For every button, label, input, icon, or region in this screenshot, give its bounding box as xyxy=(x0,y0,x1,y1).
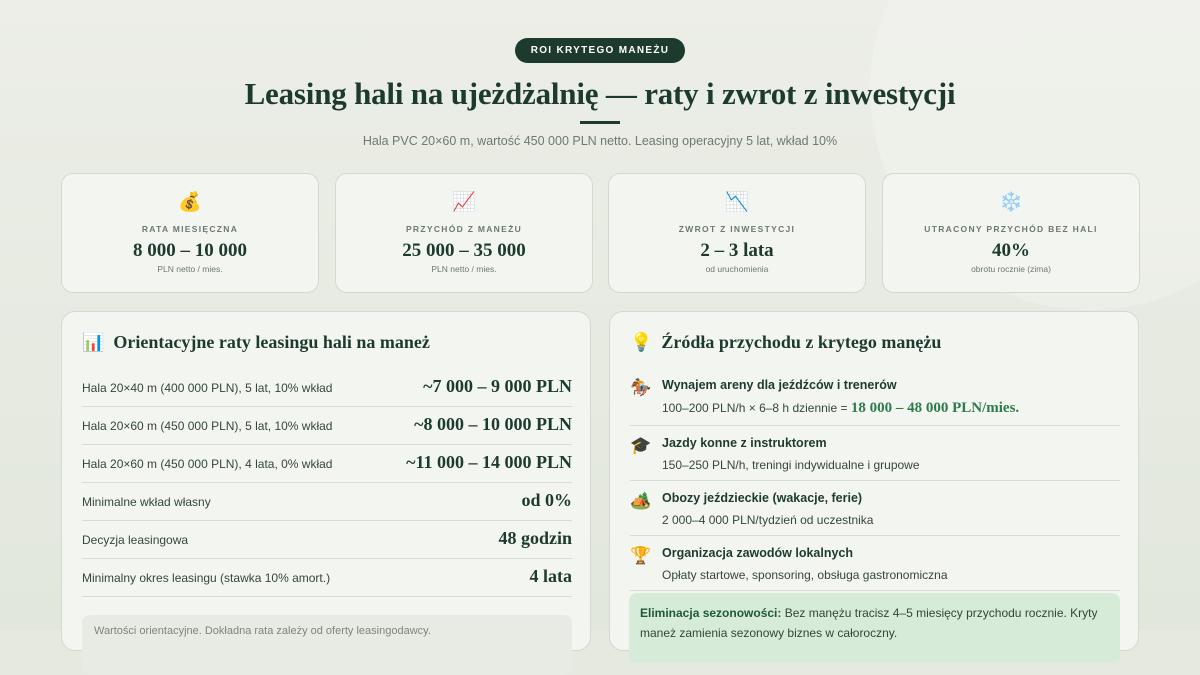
card: przychód: PLN netto / mies. xyxy=(431,264,497,274)
item: wynajem: 🏇 xyxy=(630,378,651,397)
card: rata: PLN netto / mies. xyxy=(157,264,223,274)
item: obozy: Obozy jeździeckie (wakacje, ferie) xyxy=(662,491,862,505)
panel: raty leasingu xyxy=(61,311,591,651)
row 2 xyxy=(82,407,572,445)
note: Wartości orientacyjne. Dokładna rata zależy od oferty leasingodawcy. xyxy=(94,625,431,637)
item: zawody: Opłaty startowe, sponsoring, obsługa gastronomiczna xyxy=(662,568,948,582)
card: przychód: 25 000 – 35 000 xyxy=(402,240,526,261)
row 1: ~7 000 – 9 000 PLN xyxy=(423,376,572,396)
card: przychód xyxy=(335,173,593,293)
row 4: od 0% xyxy=(521,490,572,510)
item: zawody: Organizacja zawodów lokalnych xyxy=(662,546,853,560)
card: utracony: obrotu rocznie (zima) xyxy=(971,264,1051,274)
item: jazdy: 🎓 xyxy=(630,436,651,455)
panel: źródła przychodu xyxy=(609,311,1139,651)
row 3: ~11 000 – 14 000 PLN xyxy=(406,452,572,472)
item: jazdy xyxy=(630,432,1120,481)
card: zwrot xyxy=(608,173,866,293)
row 4 xyxy=(82,483,572,521)
item: jazdy: Jazdy konne z instruktorem xyxy=(662,436,827,450)
card: zwrot: 📉 xyxy=(725,192,749,213)
row 3 xyxy=(82,445,572,483)
card: rata: RATA MIESIĘCZNA xyxy=(142,224,238,234)
card: rata xyxy=(61,173,319,293)
row 3: Hala 20×60 m (450 000 PLN), 4 lata, 0% wkład xyxy=(82,457,332,471)
card: rata: 💰 xyxy=(178,192,202,213)
row 5 xyxy=(82,521,572,559)
row 6: Minimalny okres leasingu (stawka 10% amort.) xyxy=(82,571,330,585)
item: obozy xyxy=(630,487,1120,536)
card: utracony: 40% xyxy=(992,240,1030,261)
row 2: Hala 20×60 m (450 000 PLN), 5 lat, 10% wkład xyxy=(82,419,332,433)
card: utracony: UTRACONY PRZYCHÓD BEZ HALI xyxy=(924,224,1098,234)
row 6: 4 lata xyxy=(530,566,572,586)
callout: Eliminacja sezonowości: Bez manężu tracisz 4–5 miesięcy przychodu rocznie. Kryty maneż zamienia sezonowy biznes w całoroczny. xyxy=(640,606,1098,640)
card: utracony: ❄️ xyxy=(999,192,1023,213)
note xyxy=(82,615,572,675)
card: rata: 8 000 – 10 000 xyxy=(133,240,247,261)
badge: ROI KRYTEGO MANEŻU xyxy=(531,45,669,56)
item: obozy: 🏕️ xyxy=(630,491,651,510)
item: zawody xyxy=(630,542,1120,591)
row 2: ~8 000 – 10 000 PLN xyxy=(414,414,572,434)
card: przychód: PRZYCHÓD Z MANEŻU xyxy=(406,224,522,234)
card: zwrot: 2 – 3 lata xyxy=(700,240,774,261)
card: przychód: 📈 xyxy=(452,192,476,213)
item: zawody: 🏆 xyxy=(630,546,651,565)
badge xyxy=(515,38,685,63)
row 5: 48 godzin xyxy=(498,528,572,548)
item: obozy: 2 000–4 000 PLN/tydzień od uczestnika xyxy=(662,513,873,527)
row 4: Minimalne wkład własny xyxy=(82,495,211,509)
row 5: Decyzja leasingowa xyxy=(82,533,188,547)
row 1: Hala 20×40 m (400 000 PLN), 5 lat, 10% wkład xyxy=(82,381,332,395)
item: wynajem: 100–200 PLN/h × 6–8 h dziennie = 18 000 – 48 000 PLN/mies. xyxy=(662,400,1019,416)
item: jazdy: 150–250 PLN/h, treningi indywidualne i grupowe xyxy=(662,458,920,472)
subtitle: Hala PVC 20×60 m, wartość 450 000 PLN netto. Leasing operacyjny 5 lat, wkład 10% xyxy=(363,134,837,148)
item: wynajem: Wynajem areny dla jeźdźców i trenerów xyxy=(662,378,897,392)
row 6 xyxy=(82,559,572,597)
title: Leasing hali na ujeżdżalnię — raty i zwrot z inwestycji xyxy=(245,76,955,111)
card: zwrot: ZWROT Z INWESTYCJI xyxy=(679,224,795,234)
callout xyxy=(629,593,1120,663)
card: utracony xyxy=(882,173,1140,293)
row 1 xyxy=(82,369,572,407)
card: zwrot: od uruchomienia xyxy=(706,264,768,274)
panel heading: 📊 Orientacyjne raty leasingu hali na maneż xyxy=(82,332,430,352)
item: wynajem xyxy=(630,374,1120,426)
panel heading: 💡 Źródła przychodu z krytego manężu xyxy=(630,332,941,352)
